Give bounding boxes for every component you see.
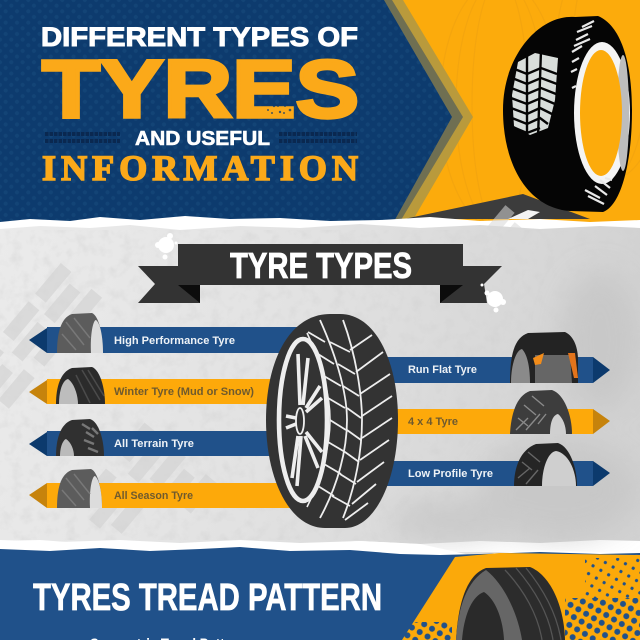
blurred grey stains	[390, 270, 640, 540]
label: 4 x 4 Tyre	[408, 416, 458, 428]
icon: tread tyre	[456, 567, 565, 640]
navy chevron panel	[0, 0, 452, 225]
ribbon: low profile tyre	[385, 443, 610, 486]
icon: hero tyre	[404, 16, 632, 219]
tread patch	[511, 50, 558, 138]
icon: 4 x 4 tyre	[510, 390, 572, 434]
tread mark left	[45, 134, 120, 141]
faint tread print top right	[482, 205, 556, 276]
label: Low Profile Tyre	[408, 468, 493, 480]
icon: run flat tyre	[510, 332, 578, 383]
panel: tyres tread pattern	[0, 540, 640, 640]
heading: different types of: DIFFERENT TYPES OF	[41, 22, 358, 52]
tread mark right	[279, 134, 357, 141]
tyre shadow	[404, 194, 590, 219]
icon: central tyre	[266, 314, 398, 528]
label: High Performance Tyre	[114, 335, 235, 347]
panel: tyre types background	[0, 205, 640, 567]
ribbon: all terrain tyre	[29, 419, 287, 456]
paint splat bottom right	[480, 284, 506, 312]
banner left tail	[138, 266, 200, 303]
yellow tyre backdrop	[402, 553, 640, 640]
chevron outer band	[385, 0, 473, 225]
halftone dots	[585, 558, 640, 598]
icon: winter tyre	[56, 367, 105, 404]
label: All Terrain Tyre	[114, 438, 194, 450]
label: All Season Tyre	[114, 490, 193, 502]
ribbon: 4 x 4 tyre	[385, 390, 610, 434]
heading: tyres: TYRES	[42, 44, 359, 135]
banner right tail	[440, 266, 502, 303]
banner folds	[178, 285, 463, 303]
label: Run Flat Tyre	[408, 364, 477, 376]
banner title: TYRE TYPES	[230, 245, 412, 286]
ribbon: run flat tyre	[385, 332, 610, 383]
header panel	[0, 0, 640, 230]
white ground slash	[508, 210, 540, 219]
ribbon: all season tyre	[29, 469, 297, 508]
paint splat top left	[155, 233, 178, 260]
ghost tyre outlines	[440, 0, 640, 230]
sidewall ribs	[571, 21, 612, 204]
icon: all terrain tyre	[56, 419, 104, 456]
heading: and useful: AND USEFUL	[135, 128, 270, 150]
section heading: TYRES TREAD PATTERN	[33, 577, 382, 619]
white rim ring	[574, 42, 630, 184]
ribbon: winter tyre	[29, 367, 287, 404]
icon: low profile tyre	[514, 443, 577, 486]
icon: high performance tyre	[57, 313, 103, 353]
label: Winter Tyre (Mud or Snow)	[114, 386, 254, 398]
chevron inner band	[380, 0, 463, 225]
tread print texture	[0, 263, 217, 567]
wheel rim	[279, 333, 330, 507]
heading: information: INFORMATION	[42, 148, 358, 188]
icon: all season tyre	[57, 469, 102, 508]
ribbon: high performance tyre	[29, 313, 297, 353]
tread grooves	[308, 320, 392, 520]
banner: tyre types	[138, 233, 506, 312]
